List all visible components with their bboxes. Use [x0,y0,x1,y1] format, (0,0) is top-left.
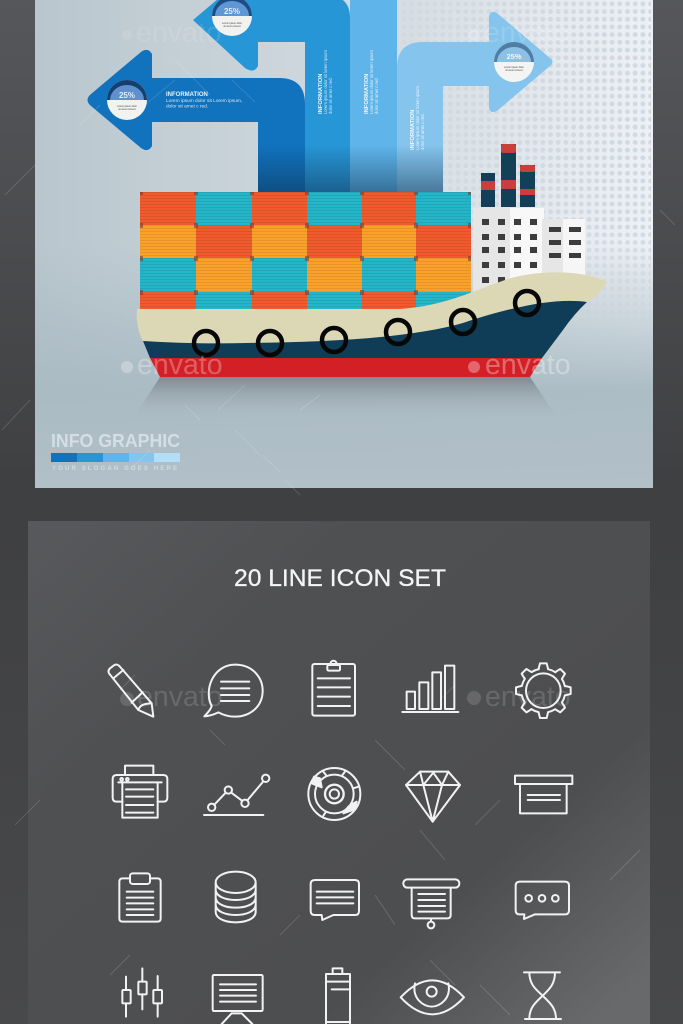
portholes [194,291,539,355]
watermarks: envato [485,349,571,381]
text: information pale arrow: INFORMATION [410,110,416,150]
watermarks: envato [137,349,223,381]
text: information medium arrow: dolor sit amet c red. [328,77,333,114]
watermarks: envato [485,681,571,713]
badge: 25% medium arrow: Lorem ipsum dolor [222,22,242,25]
logo: info graphic: INFO GRAPHIC [51,430,180,451]
badge: 25% dark arrow: 25% [119,91,135,100]
icon rows 1 and 2 [109,661,572,822]
icon: chat dots [516,882,569,919]
badge: 25% medium arrow: 25% [224,7,240,16]
text: information pale arrow: Lorem ipsum dolor sit lorem ipsum [415,85,420,150]
text: information pale arrow [410,85,425,150]
colour strip [51,453,180,462]
icon: diamond [406,772,460,822]
ship shadow [135,377,556,416]
icon: presentation board [213,975,263,1024]
icon: archive box [515,776,572,813]
icon: poker chip [308,768,360,820]
panel: line icon set [28,521,650,1024]
lower panel shading [35,0,653,488]
icon rows 3 and 4 [119,872,569,1024]
badge: 25% dark arrow: Lorem ipsum dolor [117,105,137,108]
text: information medium arrow: Lorem ipsum dolor sit lorem ipsum [323,49,328,114]
badge: 25% pale arrow [494,42,534,82]
badge: 25% dark arrow [107,80,147,120]
icon: bar chart [402,666,458,712]
panel: ship infographic [35,0,653,488]
text: information pale arrow: dolor sit amet c red. [420,113,425,150]
watermarks: envato [484,17,570,49]
icon: projector screen [403,879,459,928]
icon: coin stack [216,872,256,922]
text: information light arrow [364,49,379,114]
hull cream deck [137,272,607,343]
badge: 25% pale arrow: 25% [506,52,522,61]
arrow: pale blue right [397,12,552,192]
watermarks: envato [136,17,222,49]
text: information dark arrow: dolor sit amet c red. [166,104,208,110]
text: information light arrow: dolor sit amet c red. [374,77,379,114]
arrow: dark blue left [88,50,305,192]
watermarks: envato [137,681,223,713]
badge: 25% medium arrow: sit amet consect [223,25,241,28]
text: information dark arrow: Lorem ipsum dolor sit Lorem ipsum, [166,98,242,104]
funnels [481,144,535,207]
icon: speech bubble [204,665,263,717]
icon: clipboard [312,661,355,716]
icon: hourglass [524,972,561,1019]
icon: eye [401,980,464,1014]
icon: line chart [204,775,269,815]
cargo containers [140,192,471,314]
badge: 25% pale arrow: Lorem ipsum dolor [504,66,524,69]
text: information dark arrow [166,92,242,110]
badge: 25% pale arrow: sit amet consect [505,69,523,72]
heading: 20 LINE ICON SET [234,565,446,592]
dotted world map [444,2,651,288]
text: information light arrow: INFORMATION [364,74,370,114]
icon: clipboard list [119,873,161,922]
arrow: medium blue up-left [193,0,350,192]
arrow base fade [258,145,443,192]
icon: battery [326,968,350,1023]
text: information dark arrow: INFORMATION [166,92,208,98]
hull dark [143,296,587,358]
badge: 25% medium arrow [212,0,252,36]
icon: chat rectangle [311,880,359,920]
main superstructure [473,208,544,298]
icon: sliders [122,968,162,1017]
text: information medium arrow [318,49,333,114]
logo: info graphic: YOUR SLOGAN GOES HERE [52,466,177,472]
icon: gear [516,663,571,718]
text: information medium arrow: INFORMATION [318,74,324,114]
hull red keel [150,358,542,377]
badge: 25% dark arrow: sit amet consect [118,108,136,111]
watermarks [120,17,571,713]
text: information light arrow: Lorem ipsum dolor sit lorem ipsum [369,49,374,114]
icon: pencil [109,664,153,717]
rear superstructure [542,219,585,279]
ship [137,144,607,377]
arrow: light blue vertical [350,0,397,192]
icon: printer [113,766,167,818]
logo: info graphic [51,430,180,472]
